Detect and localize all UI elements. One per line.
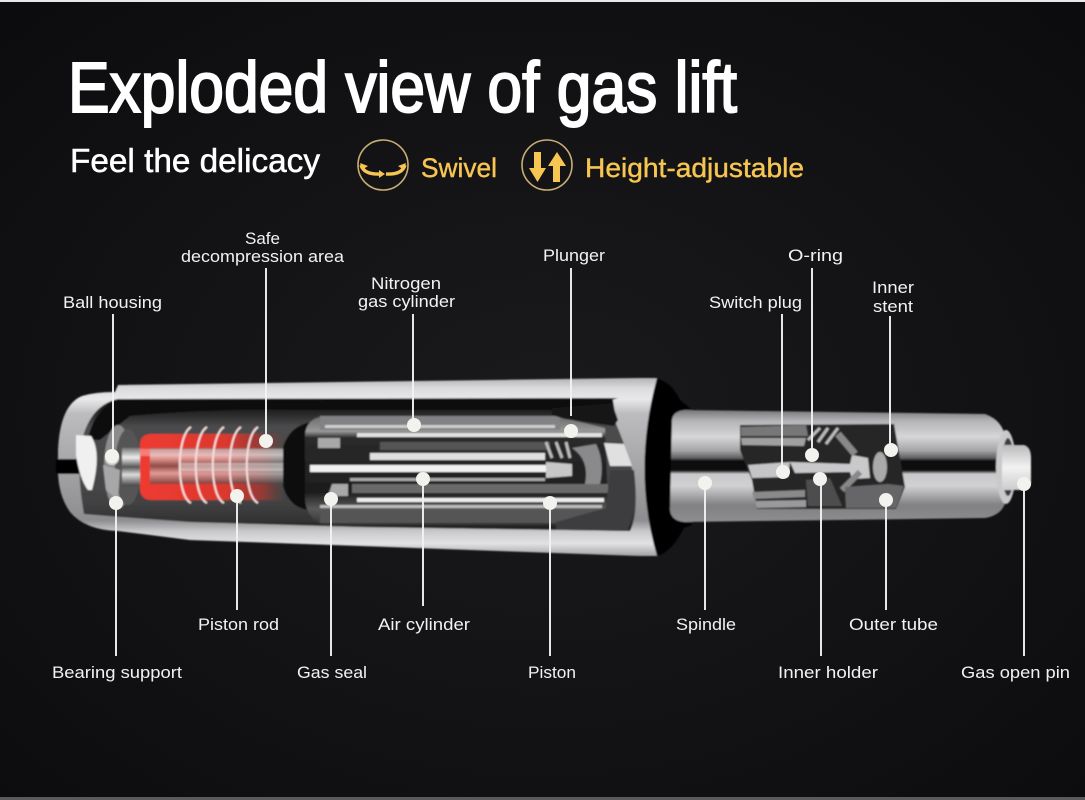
leader lines — [113, 268, 1024, 656]
part labels: Bearing support — [52, 663, 182, 682]
swivel label: Swivel — [421, 153, 497, 183]
plunger — [552, 403, 618, 426]
part labels: Plunger — [543, 246, 605, 265]
tube end stripe — [56, 459, 92, 474]
part labels: decompression area — [181, 247, 345, 266]
outer tube — [58, 378, 657, 556]
subtitle: Feel the delicacy — [70, 142, 320, 179]
part labels: gas cylinder — [358, 292, 455, 311]
spindle — [670, 410, 1016, 522]
ball housing — [103, 425, 141, 509]
icon: height adjustable — [522, 140, 572, 190]
marker dots — [105, 418, 1031, 510]
part labels: Inner — [872, 278, 914, 297]
part labels: Gas open pin — [961, 663, 1070, 682]
gas pin — [1002, 445, 1031, 490]
piston rod — [122, 434, 300, 500]
part labels: Safe — [245, 229, 280, 248]
spring — [180, 427, 258, 503]
spindle cutaway — [740, 424, 905, 509]
part labels: Air cylinder — [378, 615, 470, 634]
title: Exploded view of gas lift — [68, 49, 737, 128]
part labels: Ball housing — [63, 293, 162, 312]
part labels: Outer tube — [849, 615, 938, 634]
gas lift illustration — [56, 378, 1031, 556]
cavity — [79, 398, 636, 531]
height adjustable label: Height-adjustable — [585, 153, 804, 183]
icon: swivel — [358, 140, 408, 190]
gas seal — [283, 422, 312, 510]
part labels: Piston — [528, 663, 576, 682]
part labels: O-ring — [788, 246, 843, 265]
cavity top shadow — [88, 399, 616, 440]
black collar — [643, 378, 692, 556]
part labels: Switch plug — [709, 293, 802, 312]
part labels — [52, 229, 1070, 682]
part labels: Inner holder — [778, 663, 878, 682]
cylinder — [305, 416, 635, 530]
part labels: Spindle — [676, 615, 736, 634]
part labels: stent — [873, 297, 913, 316]
part labels: Gas seal — [297, 663, 367, 682]
cap highlight — [76, 435, 97, 490]
part labels: Nitrogen — [371, 274, 441, 293]
part labels: Piston rod — [198, 615, 279, 634]
